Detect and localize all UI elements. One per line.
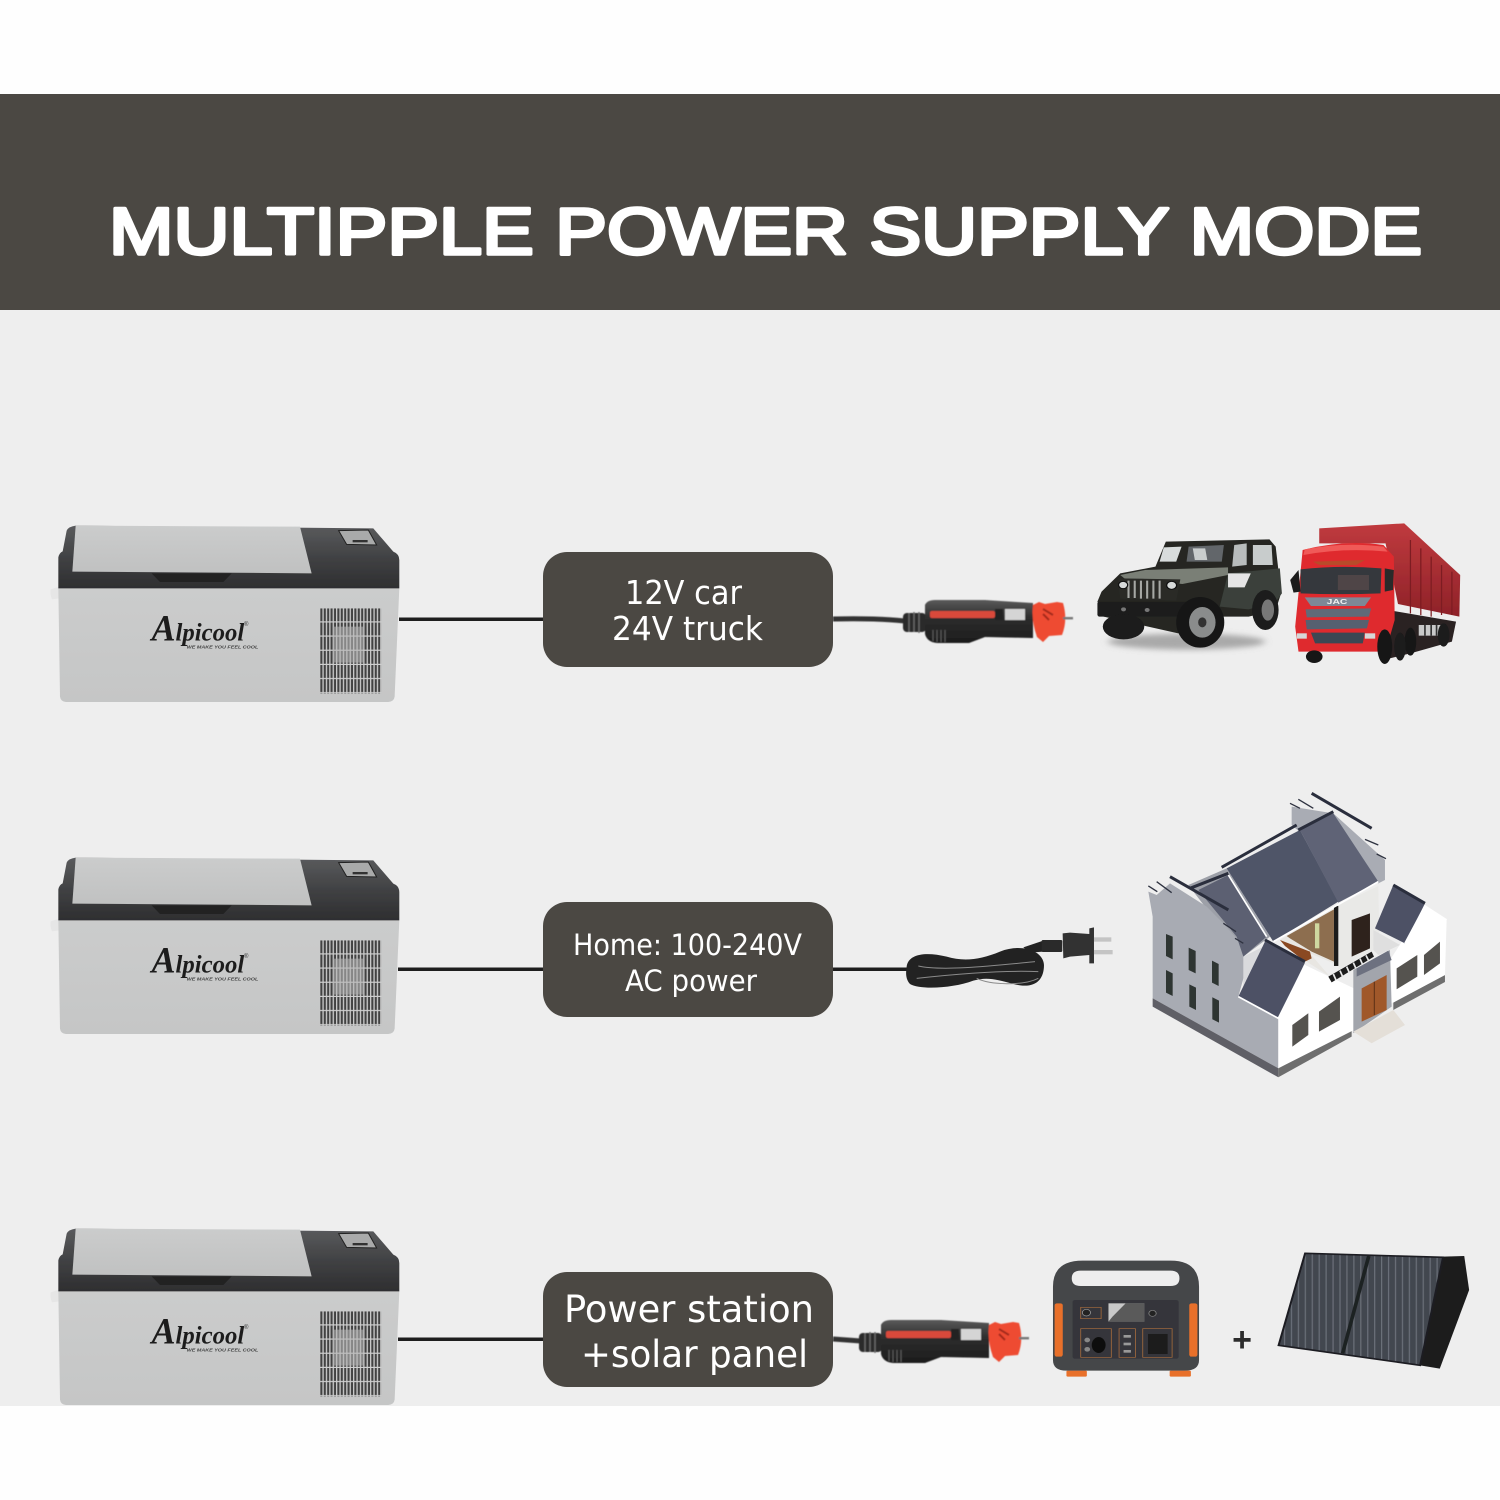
fridge 2: Alpicool bbox=[150, 940, 244, 981]
icon: truck bbox=[1290, 523, 1460, 664]
icon: portable power station bbox=[1053, 1261, 1199, 1377]
row 1: car and truck power bbox=[50, 523, 1460, 702]
label pill: home: AC power bbox=[625, 964, 757, 998]
connecting line right bbox=[833, 968, 909, 971]
label pill: car and truck: 24V truck bbox=[612, 609, 764, 648]
connecting line bbox=[399, 618, 544, 621]
fridge 2 bbox=[50, 858, 399, 1034]
fridge 1 bbox=[50, 526, 399, 702]
row 2: home AC power bbox=[50, 793, 1447, 1077]
fridge 1: WE MAKE YOU FEEL COOL bbox=[187, 644, 258, 649]
icon: jeep bbox=[1097, 539, 1282, 650]
icon: AC power cord bbox=[906, 927, 1113, 988]
car plug bbox=[833, 600, 1073, 643]
plus sign: + bbox=[1232, 1321, 1252, 1359]
fridge 3 bbox=[50, 1229, 399, 1405]
title: MULTIPPLE POWER SUPPLY MODE bbox=[109, 194, 1422, 268]
connecting line bbox=[398, 1338, 544, 1341]
label pill: home: Home: 100-240V bbox=[573, 928, 802, 962]
fridge 3: Alpicool bbox=[150, 1311, 244, 1352]
fridge 1: ® bbox=[244, 621, 249, 628]
header band bbox=[0, 94, 1500, 310]
label pill: car and truck bbox=[543, 552, 833, 667]
fridge 3: WE MAKE YOU FEEL COOL bbox=[187, 1347, 258, 1352]
label pill: car and truck: 12V car bbox=[625, 573, 742, 612]
connecting line bbox=[398, 968, 544, 971]
label pill: power station: +solar panel bbox=[581, 1333, 808, 1376]
icon: truck: JAC bbox=[1327, 598, 1347, 606]
label pill: power station bbox=[543, 1272, 833, 1387]
fridge 2: ® bbox=[244, 953, 249, 960]
light grey panel bbox=[0, 310, 1500, 1406]
label pill: power station: Power station bbox=[564, 1288, 814, 1331]
label pill: home bbox=[543, 902, 833, 1017]
fridge 1: Alpicool bbox=[150, 608, 244, 649]
fridge 3: ® bbox=[244, 1324, 249, 1331]
row 3: power station and solar panel bbox=[50, 1229, 1469, 1405]
fridge 2: WE MAKE YOU FEEL COOL bbox=[187, 976, 258, 981]
icon: house bbox=[1148, 793, 1447, 1077]
icon: solar panel bbox=[1279, 1253, 1469, 1369]
car plug bbox=[833, 1320, 1029, 1363]
